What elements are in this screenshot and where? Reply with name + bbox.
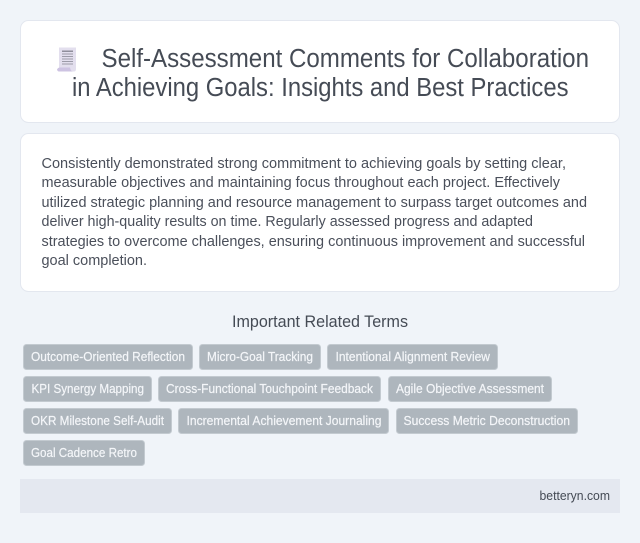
chip: Incremental Achievement Journaling (178, 408, 388, 434)
text block: summary paragraph (42, 156, 587, 269)
chip: Intentional Alignment Review: Intentional Alignment Review (336, 350, 491, 364)
chip: Agile Objective Assessment: Agile Objective Assessment (396, 382, 544, 396)
chip: Agile Objective Assessment (388, 376, 552, 402)
heading: related terms: Important Related Terms (232, 313, 408, 331)
title: Self-Assessment Comments for Collaboration (102, 45, 589, 73)
chip: Cross-Functional Touchpoint Feedback: Cross-Functional Touchpoint Feedback (166, 382, 374, 396)
panel: summary card (20, 134, 620, 292)
panel: title card (20, 20, 620, 122)
chip: KPI Synergy Mapping (24, 376, 152, 402)
text block: summary paragraph: goal completion. (42, 253, 147, 269)
footer bar: betteryn.com (540, 489, 610, 503)
chip: Outcome-Oriented Reflection: Outcome-Oriented Reflection (31, 350, 185, 364)
chip: Intentional Alignment Review (328, 344, 498, 370)
chip: Micro-Goal Tracking (200, 344, 320, 370)
chip: Goal Cadence Retro (24, 440, 144, 466)
chip: Success Metric Deconstruction: Success Metric Deconstruction (404, 414, 570, 428)
chip: KPI Synergy Mapping: KPI Synergy Mapping (32, 382, 144, 396)
text block: summary paragraph: strategies to overcome challenges, ensuring continuous improvement and successful (42, 234, 585, 250)
title (72, 45, 589, 102)
icon: receipt scroll (57, 48, 76, 72)
chip: OKR Milestone Self-Audit: OKR Milestone Self-Audit (31, 414, 164, 428)
title: in Achieving Goals: Insights and Best Practices (72, 74, 568, 102)
chip: Incremental Achievement Journaling: Incremental Achievement Journaling (186, 414, 382, 428)
chip: Success Metric Deconstruction (396, 408, 578, 434)
footer bar (20, 479, 620, 513)
text block: summary paragraph: Consistently demonstrated strong commitment to achieving goals by setting clear, (42, 156, 566, 172)
text block: summary paragraph: measurable objectives and maintaining focus throughout each project. Effectively (42, 175, 561, 191)
chip: Goal Cadence Retro: Goal Cadence Retro (31, 446, 137, 460)
text block: summary paragraph: utilized strategic planning and resource management to surpass target outcomes and (42, 195, 587, 211)
chip: Outcome-Oriented Reflection (24, 344, 192, 370)
chip: Cross-Functional Touchpoint Feedback (158, 376, 380, 402)
chip: OKR Milestone Self-Audit (24, 408, 172, 434)
chip: Micro-Goal Tracking: Micro-Goal Tracking (207, 350, 313, 364)
text block: summary paragraph: deliver high-quality results on time. Regularly assessed progress and adapted (42, 214, 533, 230)
